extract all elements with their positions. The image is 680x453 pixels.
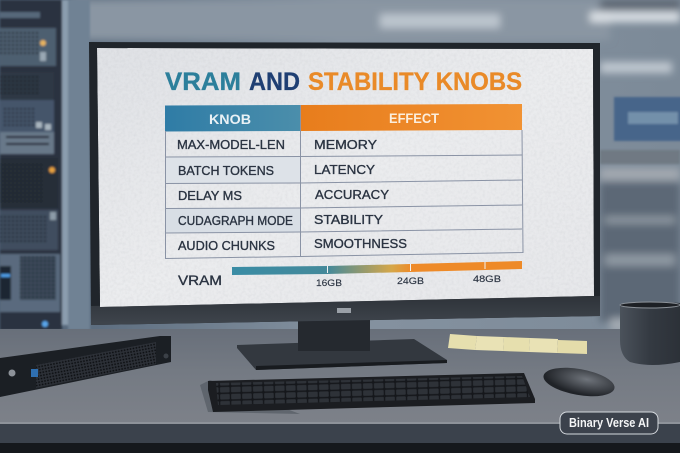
column: knob: BATCH TOKENS bbox=[178, 163, 274, 178]
column: knob: CUDAGRAPH MODE bbox=[178, 213, 293, 228]
VRAM scale: 16GB bbox=[316, 278, 342, 289]
screen bbox=[97, 48, 595, 308]
VRAM scale: 24GB bbox=[397, 276, 424, 287]
title: STABILITY KNOBS bbox=[308, 68, 522, 96]
gradient bar bbox=[232, 261, 522, 275]
watermark badge: Binary Verse AI bbox=[569, 416, 649, 430]
monitor stand bbox=[237, 316, 447, 370]
sticky notes bbox=[448, 334, 587, 354]
column: effect: EFFECT bbox=[389, 110, 439, 126]
title bbox=[165, 68, 522, 96]
watermark badge bbox=[560, 412, 658, 434]
VRAM scale: VRAM bbox=[178, 272, 222, 288]
column: effect: MEMORY bbox=[314, 137, 377, 152]
server rack bbox=[0, 0, 90, 330]
column: knob: AUDIO CHUNKS bbox=[178, 238, 275, 253]
column: knob bbox=[165, 105, 300, 253]
VRAM scale: 48GB bbox=[473, 274, 501, 285]
column: effect bbox=[301, 104, 522, 251]
mouse bbox=[541, 363, 617, 401]
VRAM scale bbox=[178, 261, 522, 289]
column: knob: DELAY MS bbox=[178, 188, 242, 203]
background: blurred server room bbox=[0, 0, 680, 335]
column: effect: STABILITY bbox=[314, 212, 383, 227]
coffee mug bbox=[620, 302, 680, 365]
title: VRAM bbox=[165, 68, 241, 96]
keyboard bbox=[200, 373, 535, 414]
column: effect: LATENCY bbox=[314, 162, 375, 177]
desk bbox=[0, 329, 680, 453]
mini PC bbox=[0, 336, 171, 397]
background monitor bbox=[600, 97, 680, 164]
column: knob: KNOB bbox=[209, 111, 251, 127]
column: effect: SMOOTHNESS bbox=[314, 236, 407, 251]
column: knob: MAX-MODEL-LEN bbox=[177, 137, 285, 152]
column: effect: ACCURACY bbox=[315, 187, 389, 202]
title: AND bbox=[249, 68, 300, 96]
table bbox=[165, 104, 523, 258]
monitor bbox=[89, 42, 600, 325]
